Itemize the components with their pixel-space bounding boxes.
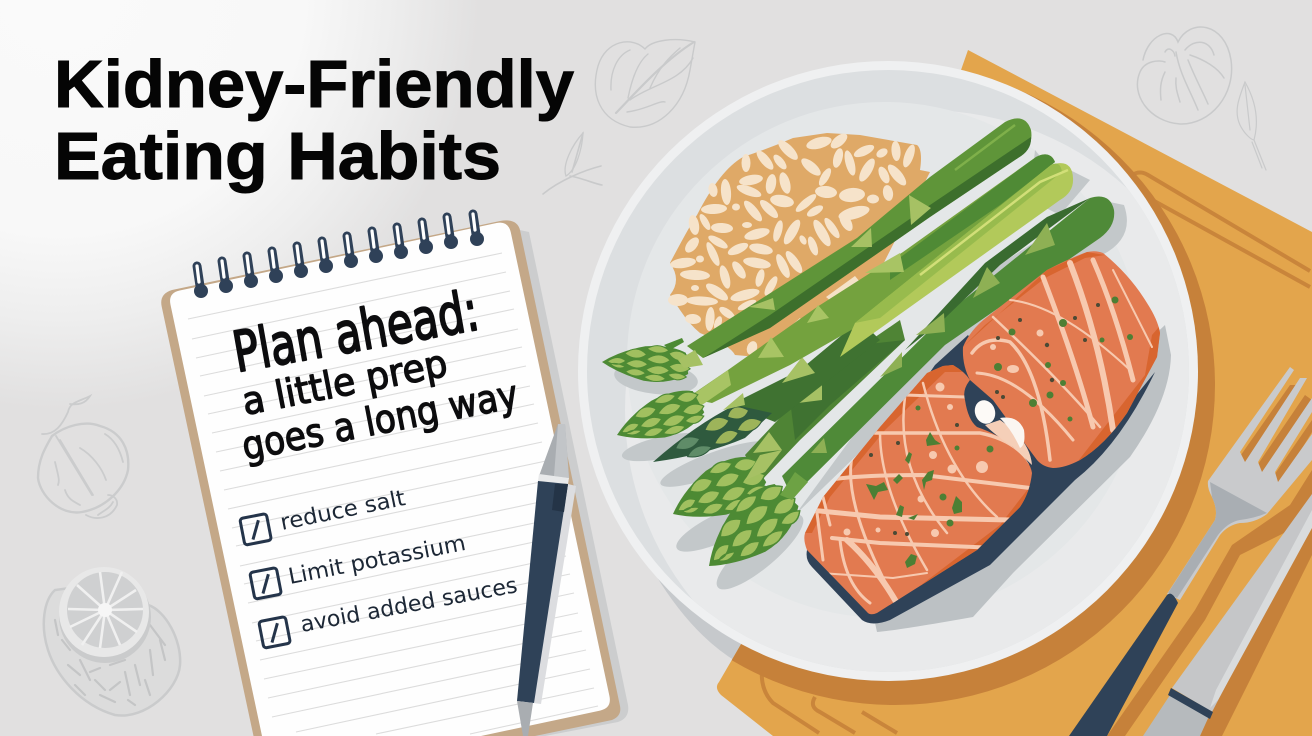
note heading: goes a long way — [238, 372, 522, 470]
spiral rings — [194, 214, 484, 298]
notepad backing — [161, 220, 620, 736]
asparagus spear 3 dark tip — [653, 320, 880, 463]
knife — [1143, 494, 1312, 736]
icon: bread and lemon outline — [44, 567, 180, 716]
fork handle — [1069, 594, 1178, 736]
asparagus spear 2 — [610, 154, 1055, 453]
checklist item: limit potassium: Limit potassium — [286, 531, 468, 590]
note heading — [228, 279, 522, 470]
checklist item: reduce salt — [240, 486, 408, 545]
spear tip 5 — [690, 473, 810, 586]
plate — [578, 61, 1225, 710]
icon: onion outline — [38, 396, 128, 518]
notepad shadow — [168, 228, 628, 736]
notepad paper — [170, 223, 610, 736]
asparagus spear 1 — [601, 118, 1031, 384]
salmon skin — [807, 335, 1155, 624]
spear tip 4 — [662, 447, 774, 536]
asparagus spear 3 light stalk — [840, 163, 1073, 357]
salmon fat — [971, 397, 1032, 465]
checklist item: avoid added sauces: avoid added sauces — [299, 573, 519, 638]
spear tip 1 — [601, 343, 691, 384]
food shadows — [613, 150, 1171, 632]
salmon fillet left — [804, 362, 1035, 620]
note heading: Plan ahead: — [228, 279, 484, 386]
placemat — [716, 50, 1312, 736]
title: Eating Habits — [54, 119, 501, 194]
asparagus spear 5 — [690, 196, 1114, 586]
fork — [1069, 367, 1312, 736]
rice grains — [668, 131, 917, 356]
fork shadow — [1107, 470, 1312, 736]
rice mound — [668, 131, 930, 360]
icon: slim leaf outline top right — [1237, 82, 1266, 170]
checklist item: limit potassium — [250, 531, 468, 599]
notepad — [161, 214, 628, 736]
title: Kidney-Friendly — [54, 47, 574, 122]
plate shadow on mat — [732, 90, 1215, 705]
icon: round leaf outline top right — [1137, 27, 1232, 124]
plate shadow on table — [655, 574, 745, 662]
salmon — [804, 251, 1165, 623]
salmon fillet right — [963, 251, 1165, 470]
pen — [517, 424, 576, 736]
asparagus spear 4 — [662, 320, 905, 536]
rice peeking between spears — [775, 276, 860, 346]
title — [54, 47, 574, 194]
checklist item: reduce salt: reduce salt — [278, 486, 408, 536]
icon: small sprig outline — [543, 133, 602, 194]
spear tip 2 — [610, 383, 710, 453]
note heading: a little prep — [238, 341, 451, 424]
icon: large leaf outline top — [595, 40, 695, 127]
knife band — [1168, 688, 1213, 719]
